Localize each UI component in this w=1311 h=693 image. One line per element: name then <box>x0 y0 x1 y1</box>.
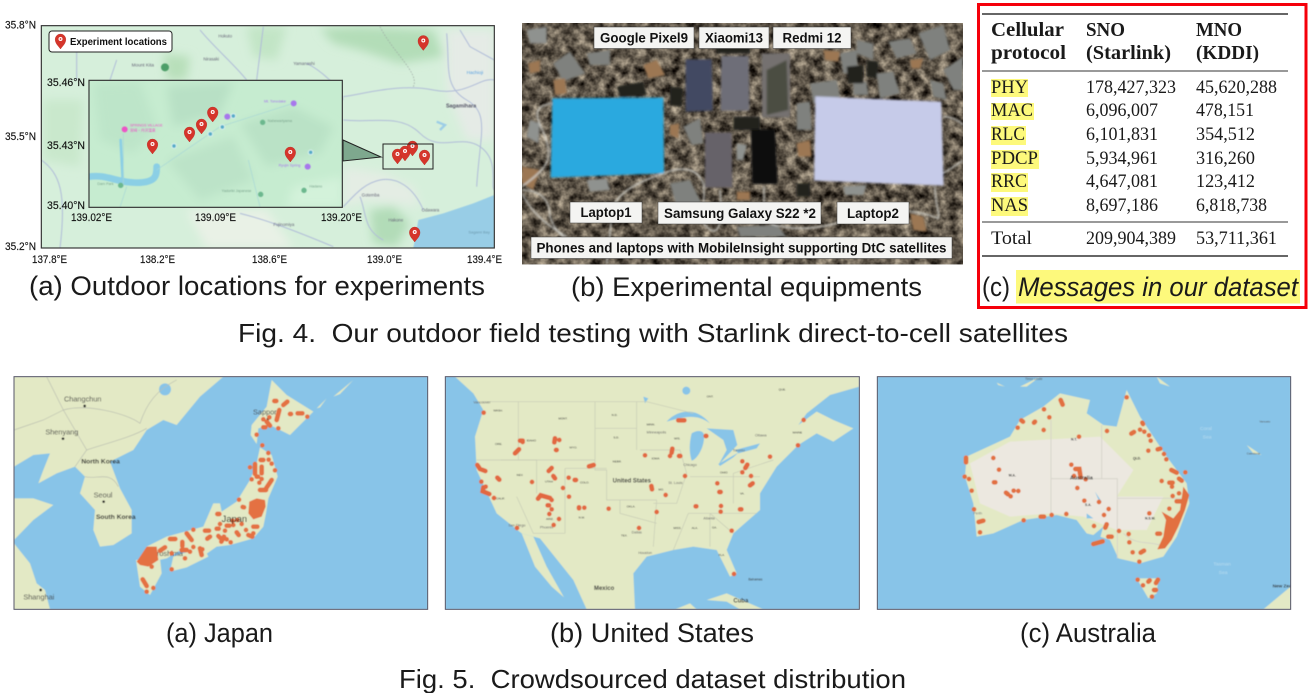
map: Australia: N.S.W. <box>1145 516 1155 520</box>
map: United States: Chicago <box>683 463 697 467</box>
axis labels: main map: 138.6°E <box>252 254 287 266</box>
map: Japan: Shenyang <box>45 427 78 436</box>
panel: Australia map <box>877 377 1301 648</box>
axis labels: main map: 35.2°N <box>5 241 36 253</box>
label: Redmi 12: Redmi 12 <box>782 30 842 46</box>
inset map: Yadoriki Japanese <box>222 189 251 193</box>
map: United States: TEX. <box>621 534 628 538</box>
table header: MNO <box>1196 19 1242 41</box>
map: Australia: Sea <box>1219 570 1228 576</box>
map: Australia: New Zealand <box>1273 584 1301 589</box>
map: Japan: Hiroshima <box>150 549 184 558</box>
map: United States: NEV. <box>517 473 524 477</box>
caption: (b) experimental equipments: (b) Experimental equipments <box>571 272 922 302</box>
label: phones and laptops note: Phones and laptops with MobileInsight supporting DtC satellites <box>536 240 946 256</box>
table rows: RLC <box>991 124 1025 145</box>
axis labels: main map <box>5 20 502 266</box>
map: United States: IOWA <box>652 456 660 460</box>
map: terrain: Gotemba <box>362 193 380 198</box>
map: Japan <box>14 377 428 609</box>
axis labels: main map: 138.2°E <box>140 254 175 266</box>
axis labels: inset map: 139.20°E <box>321 212 362 224</box>
map: United States: MO. <box>658 488 664 492</box>
map: terrain: Fujinomiya <box>273 222 295 227</box>
label: Laptop2 <box>837 202 909 224</box>
map: United States: San Diego <box>508 524 525 528</box>
map: United States: Cuba <box>733 599 749 605</box>
map: United States: ONT. <box>707 394 714 398</box>
table rows: 45,620,288 <box>1196 77 1277 98</box>
caption: figure 4: Fig. 4. Our outdoor field testing with Starlink direct-to-cell satellites <box>238 318 1068 348</box>
axis labels: inset map <box>47 77 362 224</box>
label: phones and laptops note <box>531 237 952 258</box>
table header: (KDDI) <box>1196 42 1259 64</box>
map: United States: Ottawa <box>755 434 768 438</box>
map: United States: VA. <box>740 492 745 496</box>
table rows: PHY <box>991 77 1028 98</box>
map: United States: Vancouver <box>473 400 491 404</box>
map: United States: Dallas <box>632 530 642 534</box>
map: Australia: Timor Leste <box>1025 377 1043 381</box>
caption: (c) messages in our dataset: Messages in our dataset <box>1018 272 1299 302</box>
caption: (a) Japan: (a) Japan <box>166 618 273 648</box>
table rows: MAC <box>991 100 1033 121</box>
inset map: Hadano <box>309 185 322 189</box>
axis labels: main map: 35.5°N <box>5 131 36 143</box>
panel: Japan map <box>14 377 428 648</box>
table rows: 8,697,186 <box>1086 195 1158 216</box>
map: Japan: Sapporo <box>253 408 281 417</box>
label: Redmi 12 <box>773 27 851 48</box>
inset map: Dam Park <box>97 182 114 186</box>
axis labels: main map: 35.8°N <box>5 20 36 32</box>
map: United States: OHIO <box>720 470 728 474</box>
map: United States: NEBR. <box>613 460 622 464</box>
map: United States: Atlanta <box>703 516 716 520</box>
map: United States: MINN. <box>647 422 655 426</box>
axis labels: main map: 139.4°E <box>467 254 502 266</box>
inset map <box>89 80 342 207</box>
map: United States: N.M. <box>579 516 585 520</box>
map: terrain: Hokuto <box>218 33 233 38</box>
table rows: Total <box>991 228 1032 249</box>
map: United States: Mexico <box>594 586 615 592</box>
table rows: 209,904,389 <box>1086 228 1176 249</box>
map: United States: Phoenix <box>540 526 553 530</box>
map: Australia: Sea <box>1203 435 1212 441</box>
label: Xiaomi13: Xiaomi13 <box>705 30 763 46</box>
table header: protocol <box>991 42 1066 64</box>
red highlight frame <box>978 4 1306 308</box>
label: Samsung Galaxy S22 *2: Samsung Galaxy S22 *2 <box>664 206 816 221</box>
map: Australia: Vanuatu <box>1259 419 1271 423</box>
map: terrain: Sagami Bay <box>468 229 490 234</box>
label: Laptop1 <box>570 202 642 223</box>
map: Japan: North Korea <box>81 458 120 465</box>
table rows: RRC <box>991 171 1027 192</box>
table rows: 316,260 <box>1196 148 1255 169</box>
map: United States: Toronto <box>733 448 745 452</box>
caption: (b) United States: (b) United States <box>550 618 754 648</box>
map: United States: UTAH <box>545 480 553 484</box>
map: Australia: S.A. <box>1085 503 1092 507</box>
table rows: 123,412 <box>1196 171 1255 192</box>
callout: zoom connector and source box <box>343 140 433 169</box>
map: United States: ARIZ. <box>546 517 554 521</box>
map: Australia: Australia <box>1070 475 1093 481</box>
map: United States: Minneapolis <box>647 431 666 435</box>
table rows: 6,096,007 <box>1086 100 1158 121</box>
map: terrain: Sagamihara <box>446 103 476 109</box>
map: Australia: Caledonia <box>1247 451 1260 455</box>
table header <box>991 19 1259 64</box>
map: Japan: Shanghai <box>23 592 55 601</box>
map: United States: ORE. <box>495 442 502 446</box>
map: United States: FLA. <box>719 553 725 557</box>
map: United States: S.D. <box>613 435 619 439</box>
map: Japan: South Korea <box>96 514 136 521</box>
label: Samsung Galaxy S22 *2 <box>658 202 821 224</box>
axis labels: inset map: 139.02°E <box>71 212 112 224</box>
map: terrain: Nirasaki <box>203 57 219 62</box>
table rows: 178,427,323 <box>1086 77 1176 98</box>
map: Japan: Seoul <box>94 490 113 499</box>
map: Australia: Coral <box>1200 426 1212 432</box>
map: United States: WYO. <box>569 446 577 450</box>
inset map: Nabewariyama <box>268 119 293 123</box>
caption: (c) Australia: (c) Australia <box>1020 618 1157 648</box>
map: United States: N.D. <box>612 413 618 417</box>
table rows: 354,512 <box>1196 124 1255 145</box>
inset map: SPRINGS VILLAGE <box>130 124 163 128</box>
map: United States: MAINE <box>793 430 802 434</box>
table rules <box>982 14 1288 256</box>
map: Australia <box>877 377 1301 609</box>
marker: inset pins <box>147 107 296 162</box>
map: terrain: Hachioji <box>467 70 483 75</box>
map: United States: COLO. <box>580 480 589 484</box>
map: United States: Bahamas <box>748 578 763 582</box>
table rows: 478,151 <box>1196 100 1254 121</box>
highlights: protocol rows <box>991 79 1039 216</box>
axis labels: inset map: 35.43°N <box>47 140 85 152</box>
map: United States: OKLA. <box>627 504 636 508</box>
label: Laptop2: Laptop2 <box>847 206 899 221</box>
inset map: Mt. Tonodake <box>264 100 286 104</box>
table rows: PDCP <box>991 148 1038 169</box>
label: Xiaomi13 <box>699 27 769 48</box>
map: United States: ALA. <box>692 526 698 530</box>
map: United States: WASH. <box>493 408 503 412</box>
map: terrain: Mount Kita <box>132 63 154 68</box>
legend: experiment locations: Experiment locations <box>70 37 167 48</box>
map: United States: IDAHO <box>527 439 537 443</box>
caption: (c) messages in our dataset: (c) <box>982 272 1010 302</box>
axis labels: inset map: 35.40°N <box>47 200 85 212</box>
map: Australia: W.A. <box>1009 474 1016 478</box>
axis labels: inset map: 35.46°N <box>47 77 85 89</box>
map: United States: St. Louis <box>668 481 683 485</box>
label: Google Pixel9 <box>594 27 694 48</box>
table rows: 4,647,081 <box>1086 171 1158 192</box>
inset map: 宮崎・丹沢温泉 <box>130 127 156 132</box>
table header: SNO <box>1086 19 1125 41</box>
panel: United States map <box>445 377 859 648</box>
map: Australia: N.T. <box>1071 438 1077 442</box>
table rows: 6,818,738 <box>1196 195 1267 216</box>
caption: (a) outdoor locations: (a) Outdoor locations for experiments <box>29 271 485 301</box>
table rows: 53,711,361 <box>1196 228 1277 249</box>
map: United States: MISS. <box>673 526 682 530</box>
marker: main map pins <box>392 36 430 242</box>
table header: Cellular <box>991 19 1064 41</box>
map: terrain: Odawara <box>422 208 440 213</box>
table rows: 5,934,961 <box>1086 148 1158 169</box>
map: United States: MONT. <box>558 416 568 420</box>
table rows: NAS <box>991 195 1028 216</box>
panel: messages table with red frame <box>978 4 1306 308</box>
map: United States: CALIF. <box>496 496 505 500</box>
map: Japan: Japan <box>222 514 247 524</box>
map: United States: QUE. <box>779 388 786 392</box>
map: United States: GA. <box>712 526 717 530</box>
table rows: 6,101,831 <box>1086 124 1158 145</box>
map: Australia: QLD. <box>1133 456 1141 460</box>
table header: (Starlink) <box>1086 42 1171 64</box>
label: Google Pixel9: Google Pixel9 <box>600 30 688 46</box>
panel: outdoor locations map <box>5 20 502 301</box>
table rows <box>991 77 1277 249</box>
axis labels: inset map: 139.09°E <box>195 212 236 224</box>
axis labels: main map: 137.8°E <box>32 254 67 266</box>
map: terrain: Yamanashi <box>293 61 315 66</box>
photo: gravel, phones and laptops <box>522 23 963 264</box>
label: Laptop1: Laptop1 <box>580 205 632 220</box>
map: United States <box>445 377 859 609</box>
legend: experiment locations <box>49 31 172 52</box>
map: Australia: Perth <box>973 512 982 516</box>
map: Japan: Changchun <box>64 395 101 404</box>
axis labels: main map: 139.0°E <box>367 254 402 266</box>
map: terrain <box>41 26 494 248</box>
map: Australia: Tasman <box>1213 562 1231 568</box>
map: United States: Houston <box>638 551 652 555</box>
panel: experimental equipment photo <box>522 23 963 302</box>
map: terrain: Hakone <box>388 218 404 223</box>
map: United States: WIS. <box>674 436 681 440</box>
map: United States: United States <box>613 479 652 485</box>
inset map: Ryujin Spring <box>279 164 300 168</box>
